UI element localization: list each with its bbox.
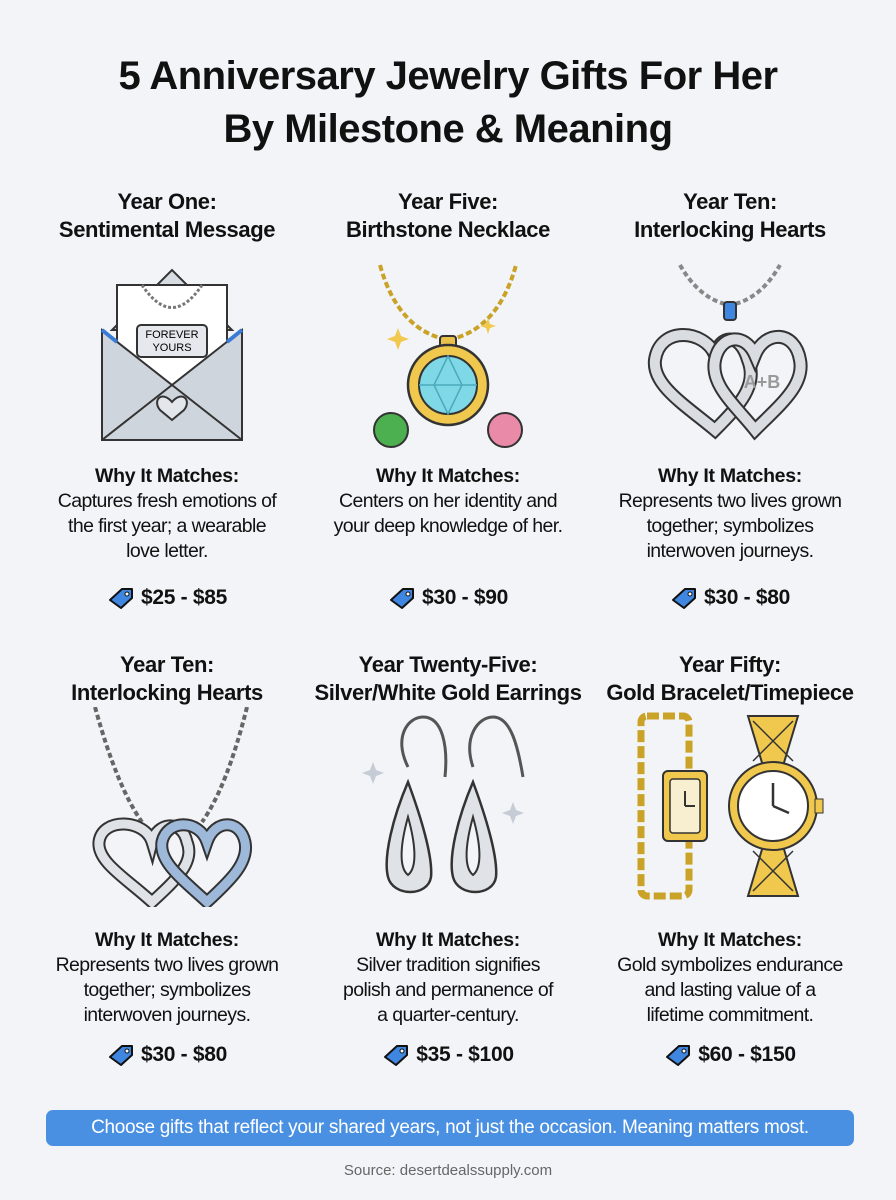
heading: Year Fifty: [679,652,781,677]
heading: Year Five: [398,189,498,214]
text block: Gold symbolizes endurance [617,954,843,976]
icon: earrings [362,716,524,894]
text block: together; symbolizes [84,979,250,1001]
heading [634,189,826,242]
text block [343,929,554,1026]
icon: envelope: FOREVER [145,329,199,341]
price: $60 - $150 [698,1043,796,1066]
text block [617,929,843,1026]
text block: Why It Matches: [658,929,802,951]
text block: Captures fresh emotions of [58,490,276,512]
title [118,54,778,151]
text block: Represents two lives grown [56,954,278,976]
heading [71,652,263,705]
text block: Centers on her identity and [339,490,557,512]
title: By Milestone & Meaning [223,107,673,151]
heading: Interlocking Hearts [634,217,826,242]
heading [314,652,582,705]
price: $35 - $100 [416,1043,514,1066]
text block: Why It Matches: [658,465,802,487]
heading: Year Twenty-Five: [359,652,537,677]
text block: interwoven journeys. [84,1004,250,1026]
heading: Gold Bracelet/Timepiece [606,680,854,705]
heading [606,652,854,705]
icon: envelope [100,268,244,441]
text block: the first year; a wearable [68,515,266,537]
text block [334,465,562,537]
heading: Year One: [117,189,217,214]
text block: Why It Matches: [376,929,520,951]
panel: year ten (2) [56,652,278,1066]
text block: Why It Matches: [95,929,239,951]
panel: year five [334,189,562,609]
heading: Year Ten: [683,189,777,214]
icon: interlocking hearts: A+B [744,372,780,392]
text block [58,465,277,562]
text block: together; symbolizes [647,515,813,537]
callout banner [46,1110,854,1146]
text block: Why It Matches: [95,465,239,487]
panel: year ten [619,189,841,609]
heading: Sentimental Message [59,217,275,242]
title: 5 Anniversary Jewelry Gifts For Her [118,54,778,98]
text block: Why It Matches: [376,465,520,487]
icon: gold watches [638,712,824,900]
heading: Silver/White Gold Earrings [314,680,582,705]
source: Source: desertdealssupply.com [344,1162,552,1179]
heading [59,189,275,242]
panel: year twenty-five [314,652,582,1066]
text block: Represents two lives grown [619,490,841,512]
heading: Interlocking Hearts [71,680,263,705]
text block [619,465,841,562]
icon: envelope: YOURS [152,342,192,354]
text block: and lasting value of a [644,979,816,1001]
price: $25 - $85 [141,586,227,609]
text block: interwoven journeys. [647,540,813,562]
text block: lifetime commitment. [647,1004,813,1026]
price: $30 - $90 [422,586,508,609]
text block: your deep knowledge of her. [334,515,562,537]
heading: Year Ten: [120,652,214,677]
price: $30 - $80 [141,1043,227,1066]
icon: birthstone necklace [373,264,523,448]
icon: two hearts [92,707,252,907]
text block: love letter. [126,540,208,562]
text block [56,929,278,1026]
heading: Birthstone Necklace [346,217,550,242]
icon: interlocking hearts [648,264,808,440]
text block: polish and permanence of [343,979,553,1001]
price: $30 - $80 [704,586,790,609]
panel: year one [58,189,277,609]
text block: a quarter-century. [377,1004,519,1026]
callout banner: Choose gifts that reflect your shared years, not just the occasion. Meaning matters most. [91,1117,809,1138]
heading [346,189,550,242]
text block: Silver tradition signifies [356,954,540,976]
panel: year fifty [606,652,854,1066]
